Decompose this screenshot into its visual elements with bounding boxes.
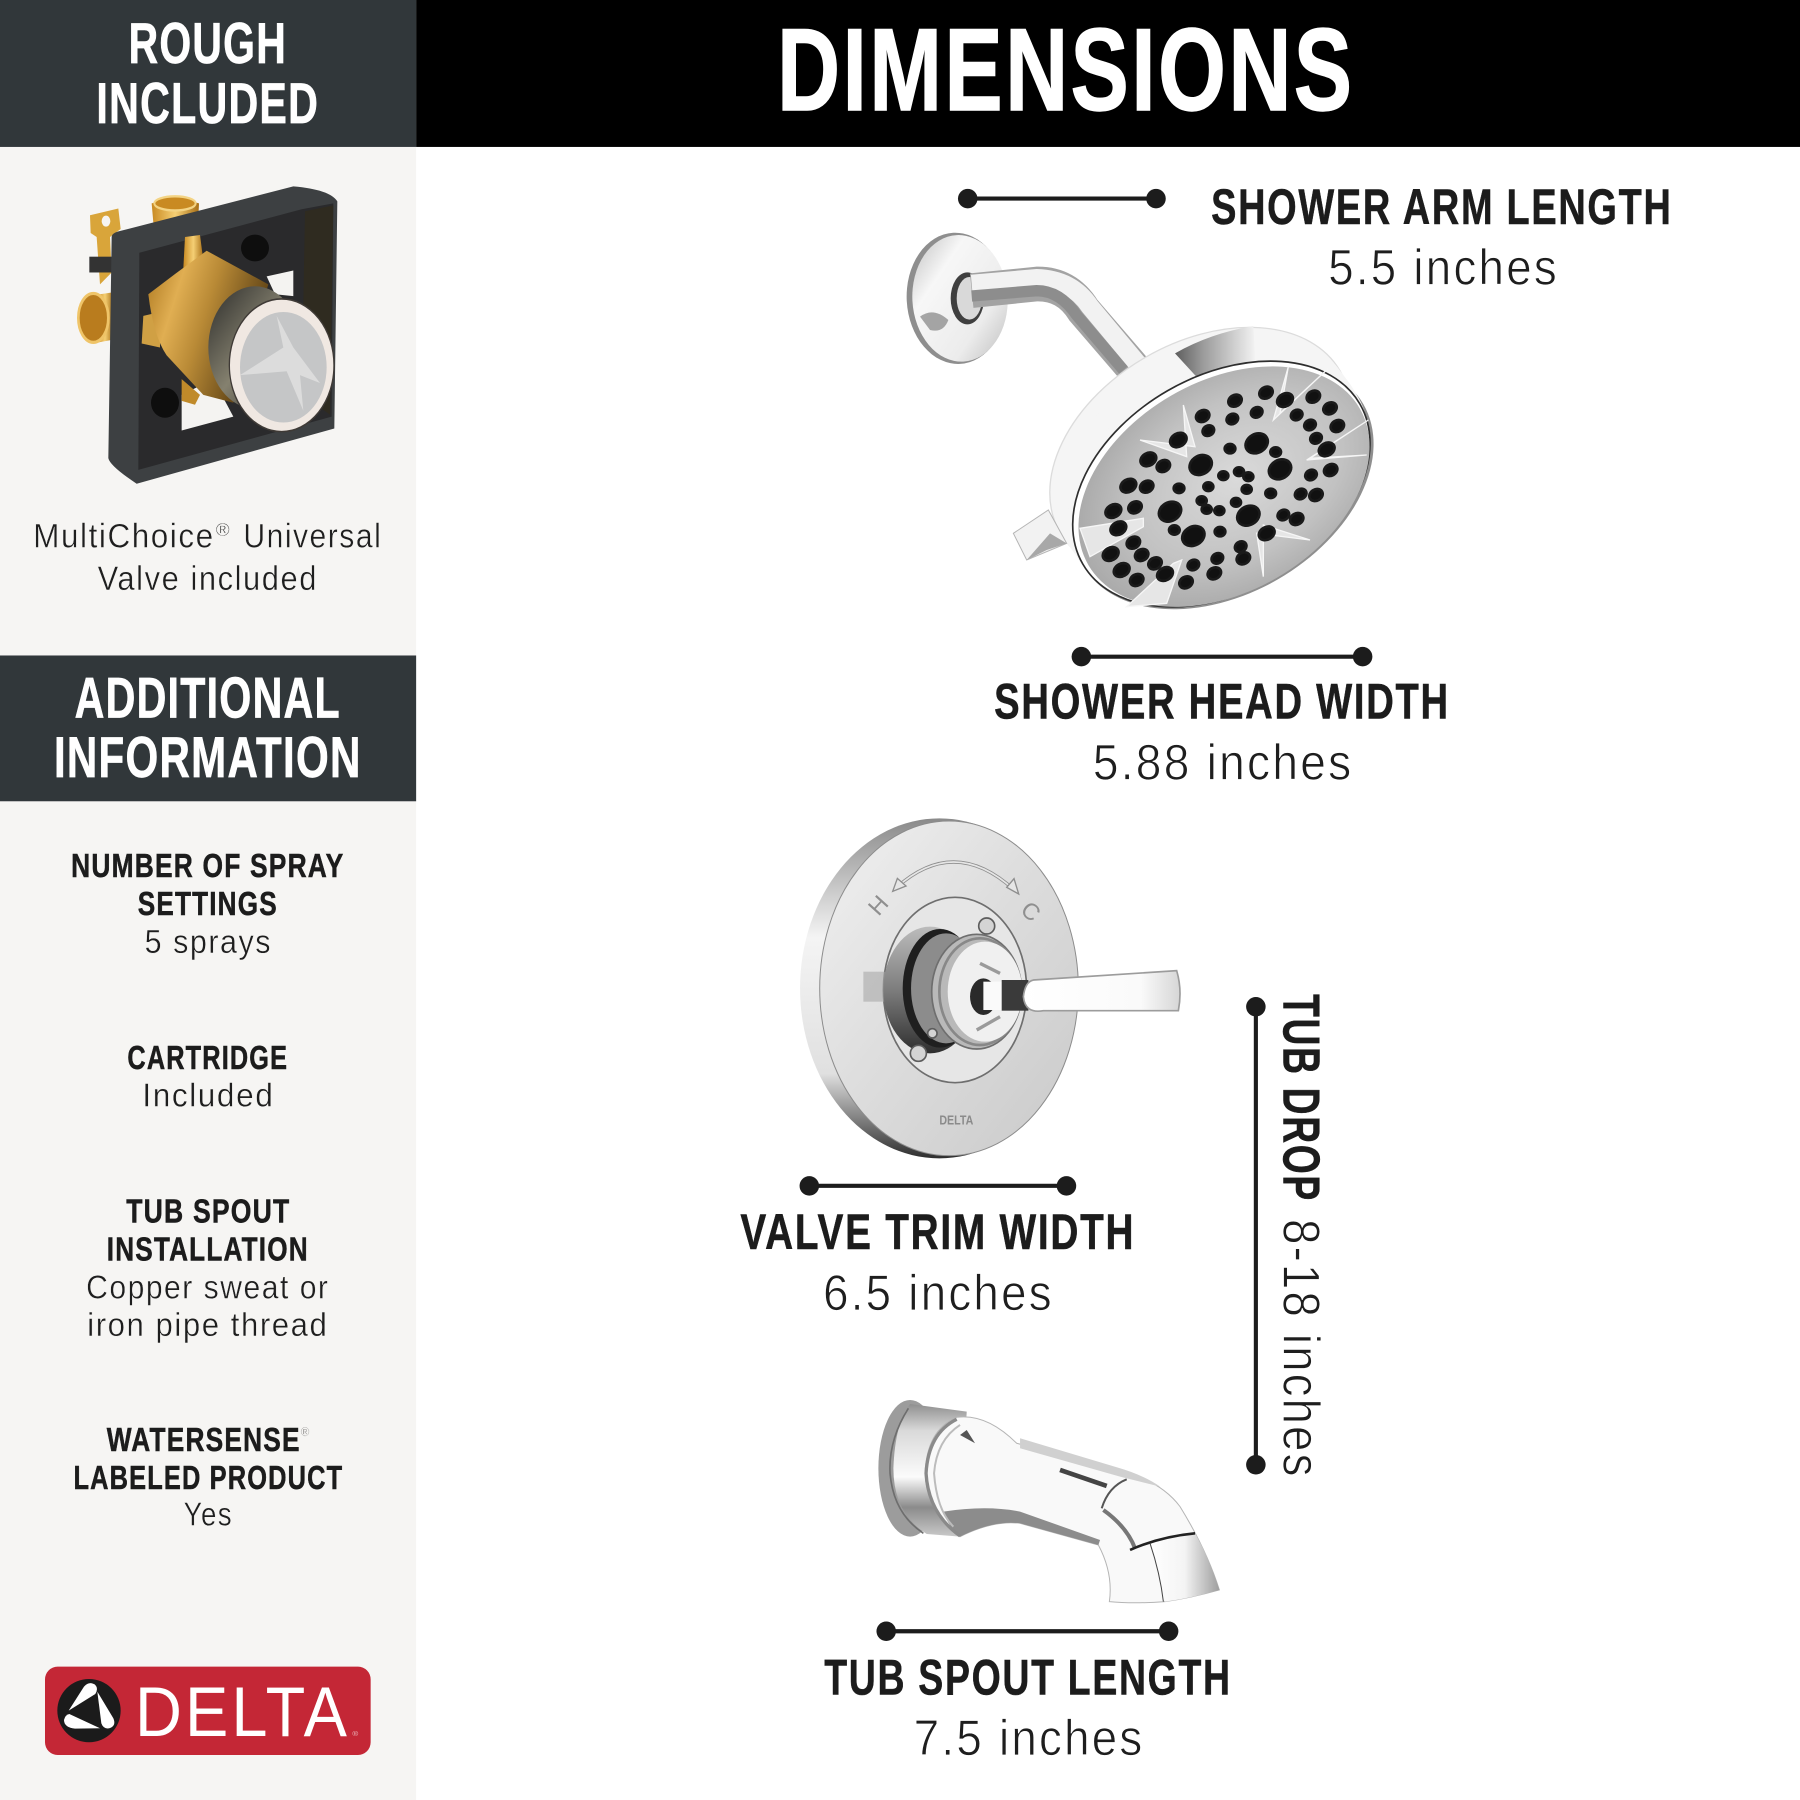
panel: shower head width	[994, 647, 1450, 790]
additional information heading bar: ADDITIONAL	[75, 666, 341, 730]
icon: valve trim plate and handle	[800, 818, 1180, 1158]
label: valve trim width: 6.5 inches	[823, 1264, 1054, 1321]
trim plate	[800, 818, 1079, 1158]
label: tub spout length: TUB SPOUT LENGTH	[824, 1648, 1232, 1705]
temperature arrow and markings	[863, 862, 1046, 1128]
shower head rim	[1029, 311, 1414, 657]
blurred shadow	[863, 972, 887, 1002]
spout body	[925, 1417, 1219, 1603]
spout outlet	[1150, 1533, 1219, 1602]
rough included heading bar: ROUGH	[129, 12, 287, 76]
valve caption: Valve included	[98, 560, 318, 598]
title bar: DIMENSIONS	[777, 4, 1355, 135]
shower arm	[951, 272, 1155, 376]
inner recess	[883, 897, 1027, 1083]
panel: shower arm length	[958, 178, 1673, 296]
valve brass body	[142, 235, 268, 405]
label: shower head width	[994, 673, 1450, 790]
info: number of spray settings: 5 sprays	[145, 924, 272, 961]
info: number of spray settings	[71, 848, 344, 961]
logo: Delta	[45, 1667, 371, 1755]
title bar	[416, 0, 1800, 147]
valve sleeve and cap	[208, 286, 334, 432]
shower head body	[1006, 276, 1418, 660]
panel: additional information	[0, 655, 416, 1534]
valve caption: ®	[216, 519, 231, 540]
dimension line: tub drop	[1246, 997, 1266, 1475]
info: cartridge	[127, 1040, 288, 1115]
valve plastic frame	[108, 186, 337, 484]
info: cartridge: CARTRIDGE	[127, 1040, 288, 1077]
valve collar	[883, 927, 981, 1053]
icon: tub spout	[878, 1400, 1219, 1603]
rough included heading bar	[0, 0, 416, 147]
dimension line: shower arm	[958, 189, 1166, 208]
panel: tub spout length	[824, 1621, 1232, 1766]
info: cartridge: Included	[142, 1078, 274, 1115]
dimension line: shower head	[1072, 647, 1372, 666]
valve caption	[33, 518, 382, 598]
label: shower head width: SHOWER HEAD WIDTH	[994, 673, 1450, 730]
info: tub spout installation: INSTALLATION	[107, 1231, 309, 1268]
screws	[910, 918, 995, 1061]
info: number of spray settings: SETTINGS	[138, 886, 278, 923]
label: tub drop: 8-18 inches	[1272, 1219, 1330, 1479]
label: shower arm length: 5.5 inches	[1328, 239, 1559, 296]
rough included heading bar: INCLUDED	[96, 72, 319, 136]
logo mark	[57, 1679, 121, 1742]
icon: shower head and arm	[903, 230, 1418, 660]
icon: rough-in valve	[78, 186, 337, 484]
valve caption: Universal	[243, 518, 382, 556]
temperature arrow and markings: DELTA	[939, 1114, 973, 1128]
info: watersense: ®	[301, 1425, 310, 1439]
info: tub spout installation: iron pipe thread	[87, 1307, 328, 1344]
label: valve trim width	[740, 1203, 1135, 1321]
additional information heading bar: INFORMATION	[54, 726, 362, 790]
dimension line: tub spout	[876, 1621, 1178, 1641]
panel: rough included	[0, 0, 416, 598]
valve top and side brass pipes	[78, 196, 199, 343]
label: valve trim width: VALVE TRIM WIDTH	[740, 1203, 1135, 1260]
wall flange	[903, 230, 1011, 367]
spout flange	[878, 1400, 967, 1537]
info: number of spray settings: NUMBER OF SPRAY	[71, 848, 344, 885]
label: shower head width: 5.88 inches	[1093, 733, 1353, 790]
valve caption: MultiChoice	[33, 518, 215, 556]
info: watersense	[73, 1422, 343, 1534]
info: watersense: Yes	[184, 1497, 233, 1534]
logo wordmark: DELTA	[135, 1672, 350, 1751]
spray nozzles	[1100, 384, 1346, 591]
valve mount screws	[151, 235, 269, 418]
info: watersense: LABELED PRODUCT	[73, 1460, 343, 1497]
label: shower arm length	[1211, 178, 1673, 296]
dimension line: valve trim	[800, 1176, 1076, 1196]
label: tub spout length: 7.5 inches	[914, 1709, 1145, 1766]
panel: tub drop	[1246, 994, 1330, 1479]
knob	[932, 934, 1028, 1049]
label: tub drop: TUB DROP	[1272, 994, 1330, 1202]
spout shading	[926, 1419, 1195, 1602]
label: tub spout length	[824, 1648, 1232, 1766]
additional information heading bar	[0, 655, 416, 801]
label: tub drop	[1272, 994, 1330, 1479]
info: watersense: WATERSENSE	[107, 1422, 301, 1459]
shower head spray face	[1036, 317, 1412, 656]
lever handle	[1023, 971, 1180, 1011]
spray face spokes	[1080, 367, 1368, 607]
temperature arrow and markings: C	[1016, 896, 1046, 927]
info: tub spout installation	[86, 1194, 329, 1344]
panel: valve trim width	[740, 1176, 1135, 1321]
info: tub spout installation: TUB SPOUT	[126, 1194, 290, 1231]
info: tub spout installation: Copper sweat or	[86, 1269, 329, 1306]
logo wordmark: ®	[352, 1730, 358, 1738]
temperature arrow and markings: H	[863, 890, 894, 920]
sidebar panel background	[0, 147, 416, 1800]
